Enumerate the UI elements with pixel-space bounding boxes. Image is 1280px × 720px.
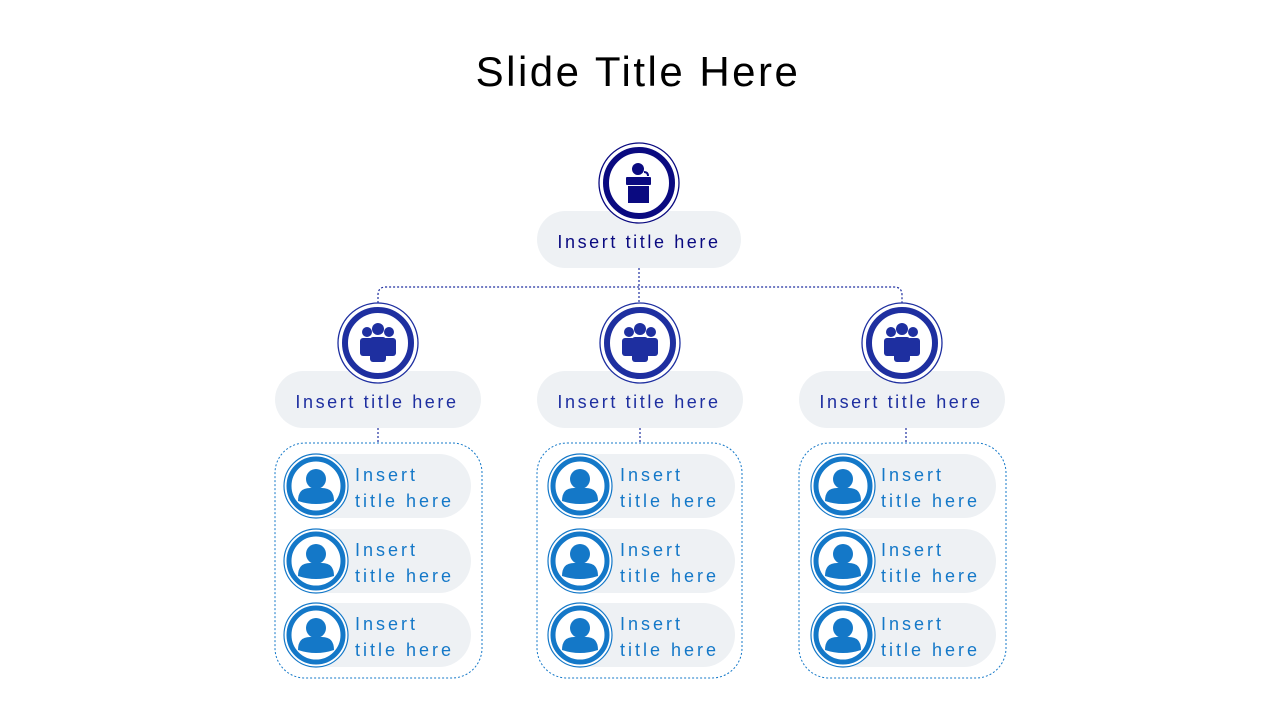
panel: column 2: Insert	[620, 614, 683, 634]
panel: column 1	[275, 303, 482, 678]
panel: column 3: Insert	[881, 465, 944, 485]
icon: podium speaker	[626, 163, 651, 203]
panel: column 3: Insert	[881, 540, 944, 560]
panel: column 1: Insert	[355, 465, 418, 485]
title: Slide Title Here	[476, 48, 800, 95]
panel: column 1: title here	[355, 491, 454, 511]
panel: column 2: title here	[620, 566, 719, 586]
connector lines	[378, 268, 906, 443]
panel: column 2: Insert title here	[557, 392, 721, 412]
panel: column 3: title here	[881, 566, 980, 586]
panel: column 2: title here	[620, 640, 719, 660]
top node: Insert title here	[557, 232, 721, 252]
panel: column 1: title here	[355, 640, 454, 660]
panel: column 3	[799, 303, 1006, 678]
panel: column 3: Insert	[881, 614, 944, 634]
panel: column 3: title here	[881, 640, 980, 660]
panel: column 2	[537, 303, 743, 678]
panel: column 1: Insert title here	[295, 392, 459, 412]
panel: column 1: Insert	[355, 540, 418, 560]
panel: column 1: title here	[355, 566, 454, 586]
panel: column 2: Insert	[620, 465, 683, 485]
panel: column 3: Insert title here	[819, 392, 983, 412]
panel: column 2: title here	[620, 491, 719, 511]
panel: column 1: Insert	[355, 614, 418, 634]
panel: column 3: title here	[881, 491, 980, 511]
top node	[537, 143, 741, 268]
panel: column 2: Insert	[620, 540, 683, 560]
